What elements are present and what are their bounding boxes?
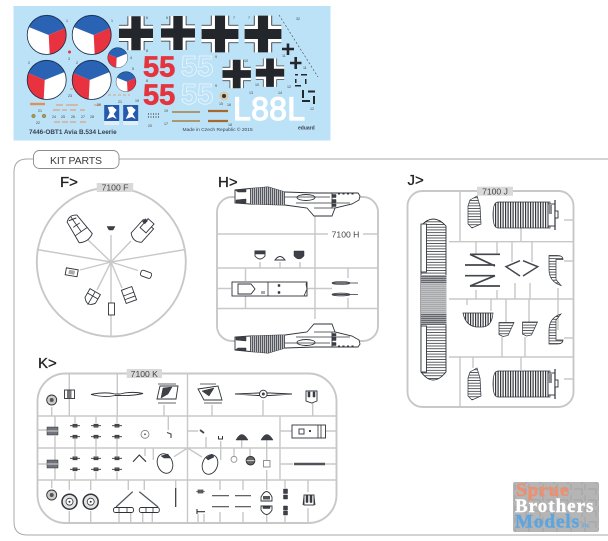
broken cross decals bbox=[295, 74, 315, 104]
decal numbers: 6 bbox=[166, 16, 168, 20]
dashed panel line bbox=[279, 15, 318, 77]
kit parts tab bbox=[34, 150, 119, 168]
wheels bbox=[62, 494, 98, 509]
decal numbers bbox=[28, 16, 314, 128]
fuselage top deck bbox=[232, 282, 307, 296]
decal numbers: 18 bbox=[228, 123, 232, 127]
runner label K: 7100 K bbox=[131, 369, 158, 379]
decal numbers: 8 bbox=[146, 49, 148, 53]
circular sprue bbox=[37, 188, 186, 336]
decal numbers: 12 bbox=[287, 85, 291, 89]
dome parts bbox=[218, 434, 273, 440]
white outline 55 markings: 55 bbox=[181, 79, 213, 111]
decal numbers: 8 bbox=[146, 79, 148, 83]
red 55 markings bbox=[143, 52, 175, 112]
decal numbers: 28 bbox=[90, 115, 94, 119]
decal numbers: 15 bbox=[219, 102, 223, 106]
decal numbers: 21 bbox=[118, 100, 122, 104]
decal numbers: 7 bbox=[248, 16, 250, 20]
watermark logo: Sprue bbox=[516, 480, 570, 501]
fuselage half upper bbox=[235, 187, 360, 216]
runner K bbox=[38, 369, 337, 523]
decal numbers: 29 bbox=[97, 103, 101, 107]
heading: K: K> bbox=[38, 355, 57, 372]
landing gear struts bbox=[114, 492, 159, 512]
small disc parts bbox=[47, 395, 57, 500]
kit parts frame bbox=[14, 159, 608, 535]
tiny part rows bbox=[70, 424, 122, 471]
decal numbers: 2 bbox=[28, 61, 30, 65]
runner label J: 7100 J bbox=[482, 186, 508, 196]
small fins bbox=[499, 322, 538, 336]
bottom row small parts bbox=[196, 489, 315, 515]
decal numbers: 24 bbox=[52, 115, 56, 119]
parts F bbox=[64, 212, 156, 315]
decal numbers: 20 bbox=[148, 124, 152, 128]
runner H bbox=[217, 187, 378, 353]
made in note: Made in Czech Republic © 2015 bbox=[182, 126, 253, 133]
heading: J: J> bbox=[408, 172, 424, 189]
engine parts bbox=[157, 384, 222, 403]
long bar part bbox=[294, 463, 325, 465]
decal numbers: 9 bbox=[215, 55, 217, 59]
decal numbers: 26 bbox=[71, 115, 75, 119]
runner J bbox=[408, 186, 574, 407]
interplane struts bbox=[465, 254, 500, 286]
lower wing bbox=[421, 219, 446, 380]
upper elevator bbox=[493, 200, 558, 230]
decal numbers: 22 bbox=[36, 121, 40, 125]
red 55 markings: 55 bbox=[143, 80, 175, 112]
heading: F: F> bbox=[60, 174, 78, 191]
sprue frame J bbox=[408, 191, 574, 407]
decal numbers: 2 bbox=[76, 61, 78, 65]
side panels bbox=[549, 256, 563, 344]
red 55 markings: 55 bbox=[143, 52, 175, 84]
sprue frame H bbox=[217, 197, 378, 341]
balkenkreuz decals bbox=[119, 16, 302, 88]
decal numbers: 6 bbox=[146, 16, 148, 20]
runner F bbox=[37, 183, 186, 336]
wide tail panel bbox=[463, 313, 493, 327]
ring and clip parts bbox=[133, 430, 204, 462]
runner label F: 7100 F bbox=[102, 183, 128, 193]
decal numbers: 7 bbox=[233, 16, 235, 20]
decal numbers: 17 bbox=[164, 122, 168, 126]
watermark logo: Models bbox=[515, 512, 580, 532]
small stencil decals bbox=[30, 89, 228, 122]
propeller right with hub bbox=[235, 390, 292, 398]
decal numbers: 1 bbox=[66, 19, 68, 23]
decal numbers: 12 bbox=[310, 107, 314, 111]
small target decal bbox=[220, 92, 228, 100]
decal numbers: 32 bbox=[296, 17, 300, 21]
bomb parts bbox=[332, 282, 358, 296]
decal numbers: 11 bbox=[303, 66, 307, 70]
cabane struts bbox=[506, 261, 538, 276]
decal numbers: 25 bbox=[61, 115, 65, 119]
tail strut bbox=[175, 488, 177, 507]
roundel decals bbox=[27, 15, 136, 99]
eduard logo: eduard bbox=[298, 126, 315, 132]
decal numbers: 27 bbox=[81, 115, 85, 119]
decal numbers: 10 bbox=[244, 59, 248, 63]
white L88L code: L88L bbox=[233, 91, 305, 127]
decal numbers: 16 bbox=[227, 103, 231, 107]
small box parts bbox=[47, 390, 74, 468]
decal numbers: 9 bbox=[215, 84, 217, 88]
small canopy parts bbox=[255, 251, 304, 260]
propeller left bbox=[91, 392, 143, 397]
decal numbers: 5 bbox=[132, 67, 134, 71]
lower rudder part bbox=[468, 368, 481, 400]
upper rudder part bbox=[468, 196, 481, 228]
cylinder head part bbox=[306, 391, 317, 403]
decal numbers: 14 bbox=[278, 91, 282, 95]
decal numbers: 3 bbox=[68, 57, 70, 61]
decal numbers: 23 bbox=[68, 94, 72, 98]
watermark logo: llc bbox=[583, 524, 590, 530]
decal numbers: 4 bbox=[130, 56, 132, 60]
watermark logo: Brothers bbox=[515, 496, 594, 517]
lion emblem decals bbox=[104, 105, 138, 125]
decal numbers: 19 bbox=[135, 99, 139, 103]
fuselage half lower bbox=[235, 324, 360, 353]
cockpit floor part bbox=[292, 425, 326, 438]
white outline 55 markings: 55 bbox=[181, 51, 213, 83]
sprue frame K bbox=[38, 374, 337, 523]
decal numbers: 11 bbox=[282, 54, 286, 58]
decal numbers: 19 bbox=[164, 109, 168, 113]
runner label H: 7100 H bbox=[332, 230, 359, 240]
decal numbers: 10 bbox=[255, 83, 259, 87]
kit parts tab: KIT PARTS bbox=[50, 155, 102, 167]
decal numbers: 21 bbox=[38, 109, 42, 113]
decal sheet title: 7446-OBT1 Avia B.534 Leerie bbox=[29, 129, 117, 136]
decal numbers: 1 bbox=[111, 19, 113, 23]
decal sheet bbox=[14, 6, 330, 140]
lower elevator bbox=[493, 369, 558, 399]
decal numbers: 13 bbox=[249, 91, 253, 95]
round and square small parts bbox=[231, 456, 270, 467]
heading: H: H> bbox=[218, 174, 238, 191]
watermark logo bbox=[513, 480, 599, 532]
helmet-shaped cowling halves bbox=[155, 452, 220, 476]
white outline 55 markings bbox=[181, 51, 213, 111]
